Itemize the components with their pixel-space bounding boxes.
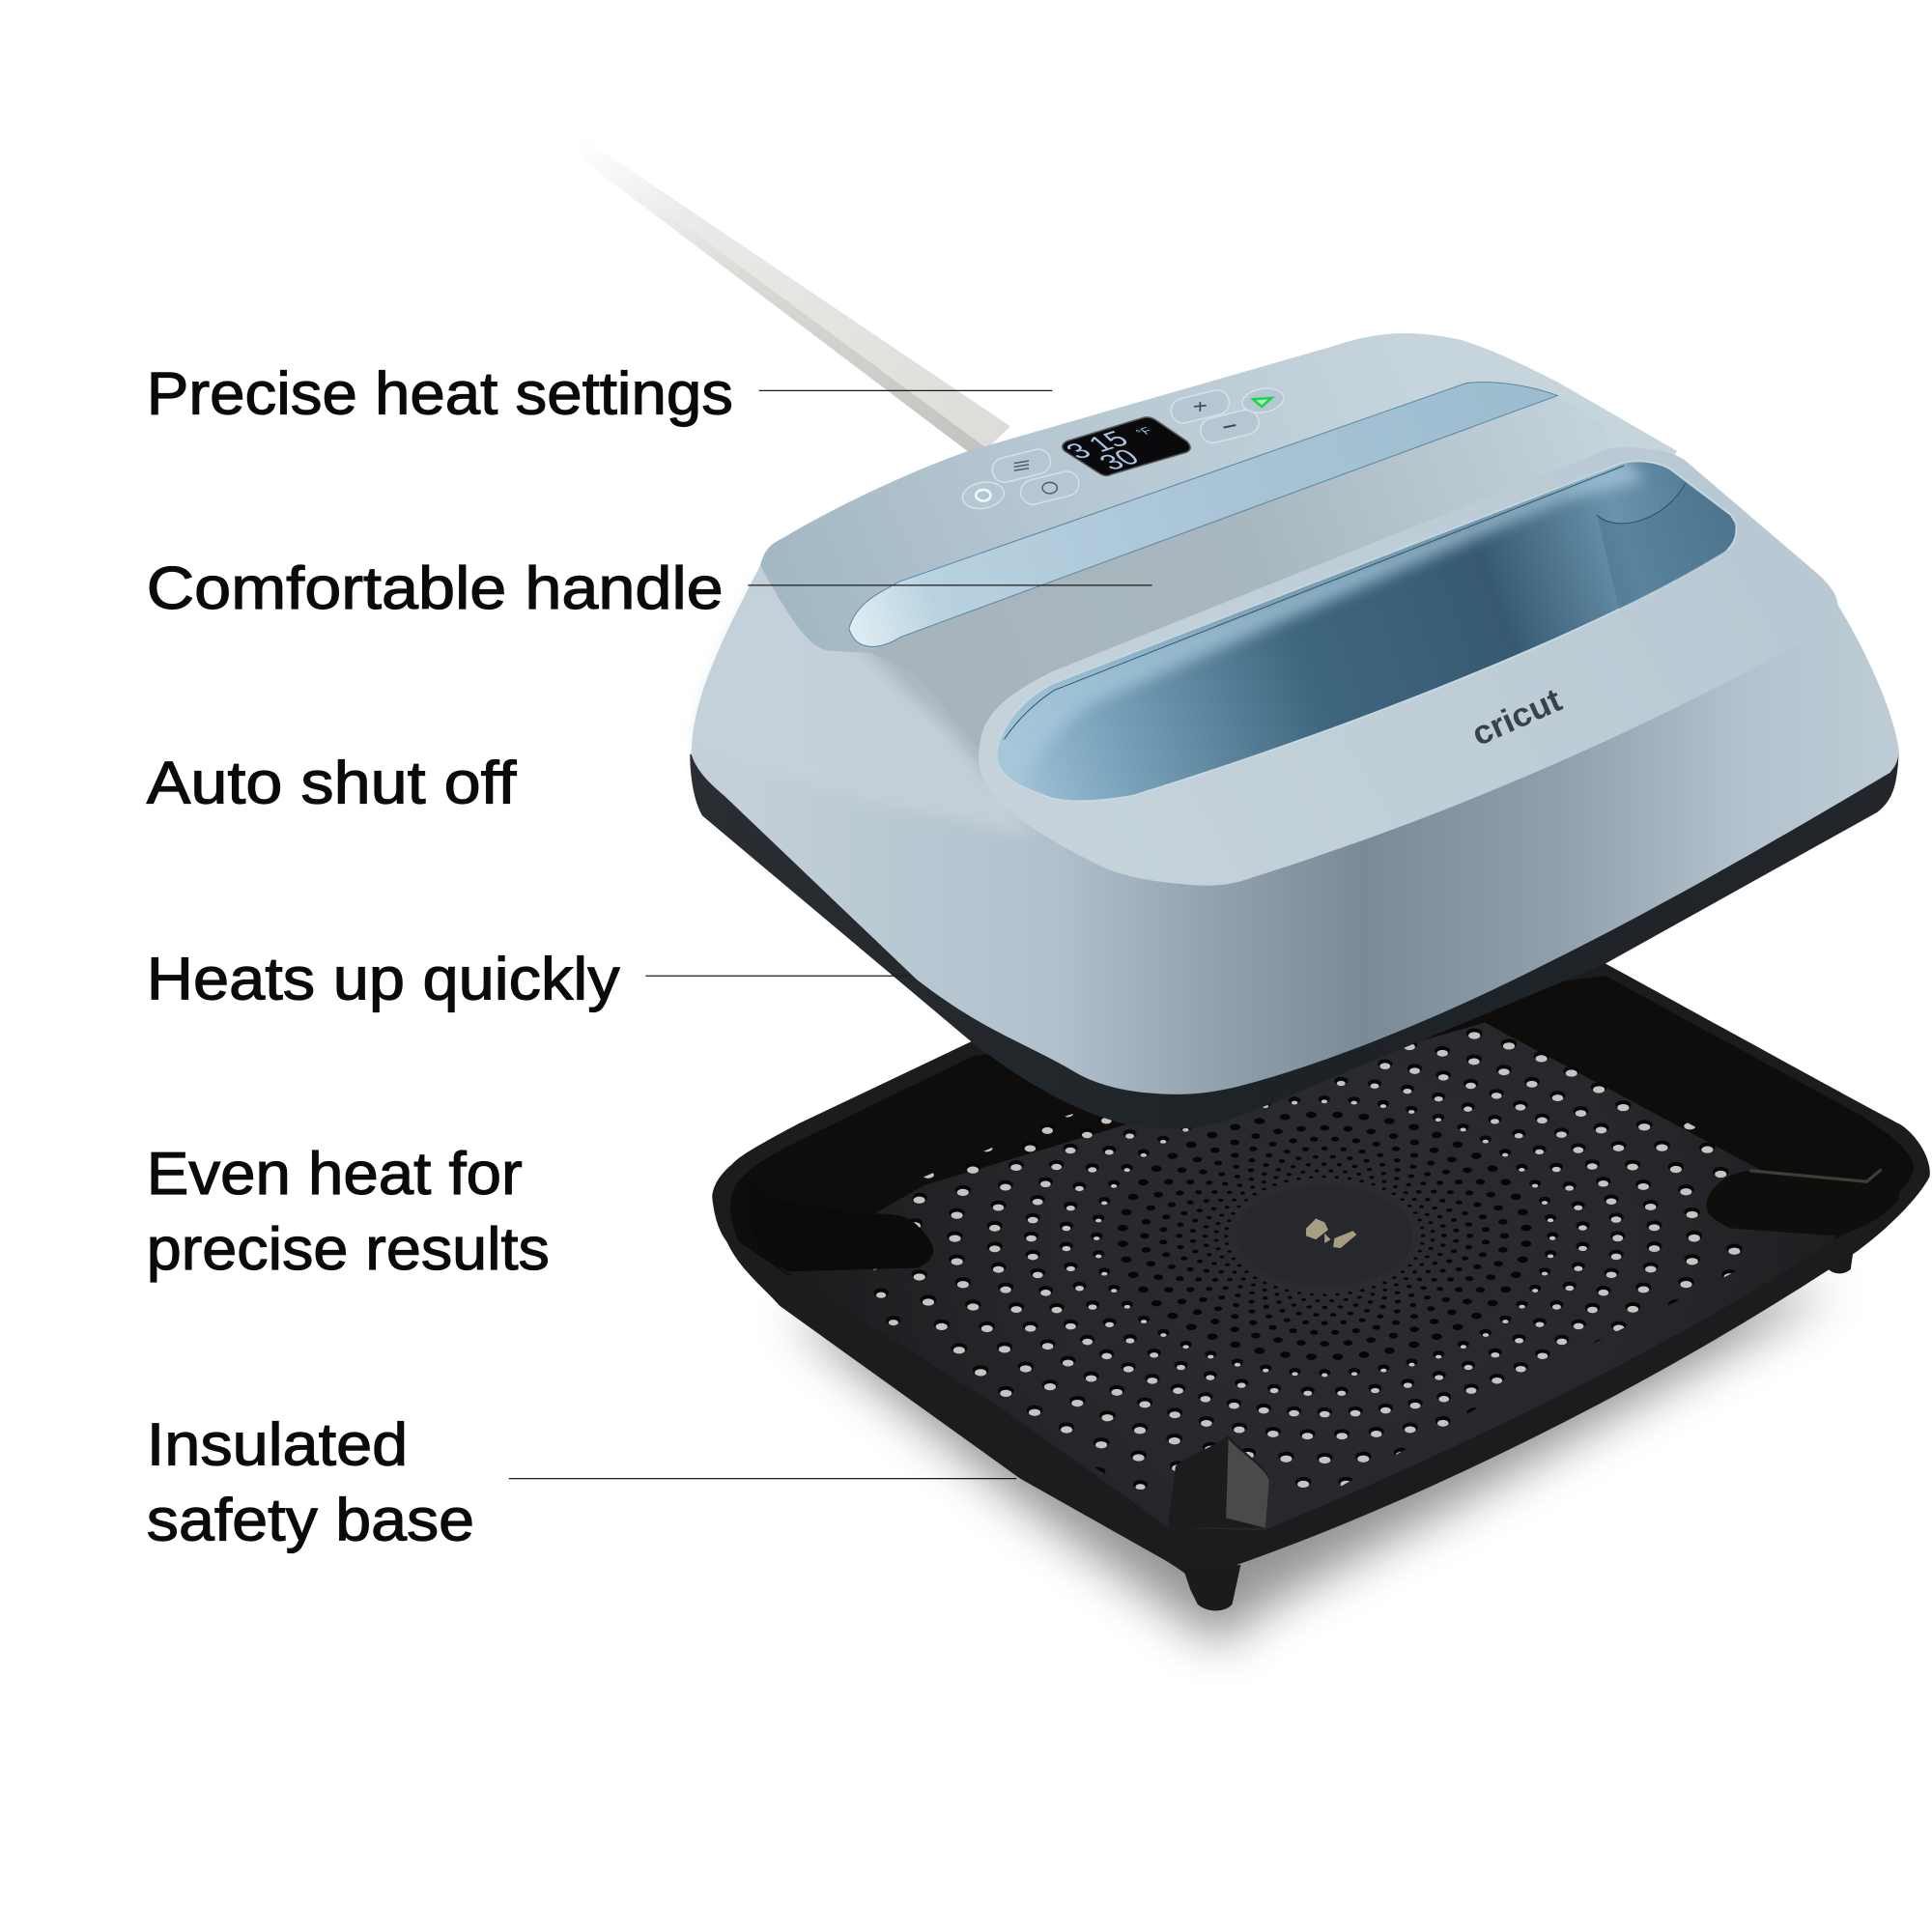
display screen bbox=[1063, 417, 1190, 475]
handle bar shadow blend bbox=[863, 640, 998, 788]
leader line: comfortable handle bbox=[748, 584, 1152, 586]
heat press upper unit bbox=[690, 333, 1899, 1129]
tray inner wall bbox=[730, 976, 1914, 1275]
bottom support block bbox=[1168, 1435, 1269, 1528]
label: precise heat settings: Precise heat settings bbox=[147, 360, 733, 428]
label: even heat for precise results: Even heat for bbox=[147, 1140, 523, 1208]
label: comfortable handle: Comfortable handle bbox=[147, 554, 724, 622]
left support block bbox=[748, 1182, 933, 1271]
black bottom rim bbox=[690, 752, 1899, 1129]
bottom block highlight bbox=[1226, 1439, 1269, 1528]
label: insulated safety base: safety base bbox=[147, 1486, 474, 1553]
power button bbox=[960, 479, 1007, 512]
label: insulated safety base: Insulated bbox=[147, 1411, 408, 1479]
center logo plate bbox=[1236, 1185, 1413, 1287]
heat button bbox=[990, 446, 1053, 485]
perforation holes bbox=[873, 1028, 1743, 1490]
back control panel bbox=[760, 333, 1677, 653]
label: auto shut off: Auto shut off bbox=[147, 750, 517, 817]
gold center logo bbox=[1306, 1218, 1356, 1248]
control panel bbox=[960, 385, 1286, 512]
infographic: heat press with feature labels bbox=[146, 163, 1930, 1665]
time readout: 30 bbox=[1094, 445, 1147, 475]
front plate bbox=[979, 447, 1837, 886]
front slot upper lip bbox=[992, 458, 1737, 801]
temperature readout: 3 15 bbox=[1060, 427, 1136, 464]
label: even heat for precise results: precise results bbox=[147, 1215, 550, 1283]
safety base tray bbox=[712, 907, 1930, 1610]
cricut logo: cricut bbox=[1466, 681, 1568, 753]
shell left highlight bbox=[696, 579, 1035, 838]
temperature unit: °F bbox=[1132, 425, 1155, 439]
leader line: heats up quickly bbox=[645, 975, 908, 977]
perforated floor bbox=[780, 1023, 1837, 1530]
timer button bbox=[1018, 469, 1082, 507]
label: heats up quickly: Heats up quickly bbox=[147, 945, 620, 1012]
light blue shell bbox=[692, 565, 1899, 1094]
front slot edge line bbox=[1005, 466, 1624, 739]
front handle slot bbox=[997, 461, 1736, 801]
power cord bbox=[573, 138, 1010, 458]
handle bar bbox=[868, 395, 1614, 752]
start button bbox=[1240, 385, 1286, 415]
drop shadow under tray bbox=[788, 1288, 1836, 1645]
right foot bbox=[1826, 1252, 1853, 1273]
minus button bbox=[1198, 408, 1262, 445]
rear handle slot bbox=[849, 383, 1557, 646]
leader line: insulated safety base bbox=[509, 1478, 1016, 1480]
plus button bbox=[1169, 387, 1232, 426]
tray outer body bbox=[712, 963, 1930, 1579]
leader line: precise heat settings bbox=[759, 389, 1052, 391]
right support block bbox=[1707, 1168, 1899, 1236]
front foot bbox=[1182, 1565, 1240, 1610]
